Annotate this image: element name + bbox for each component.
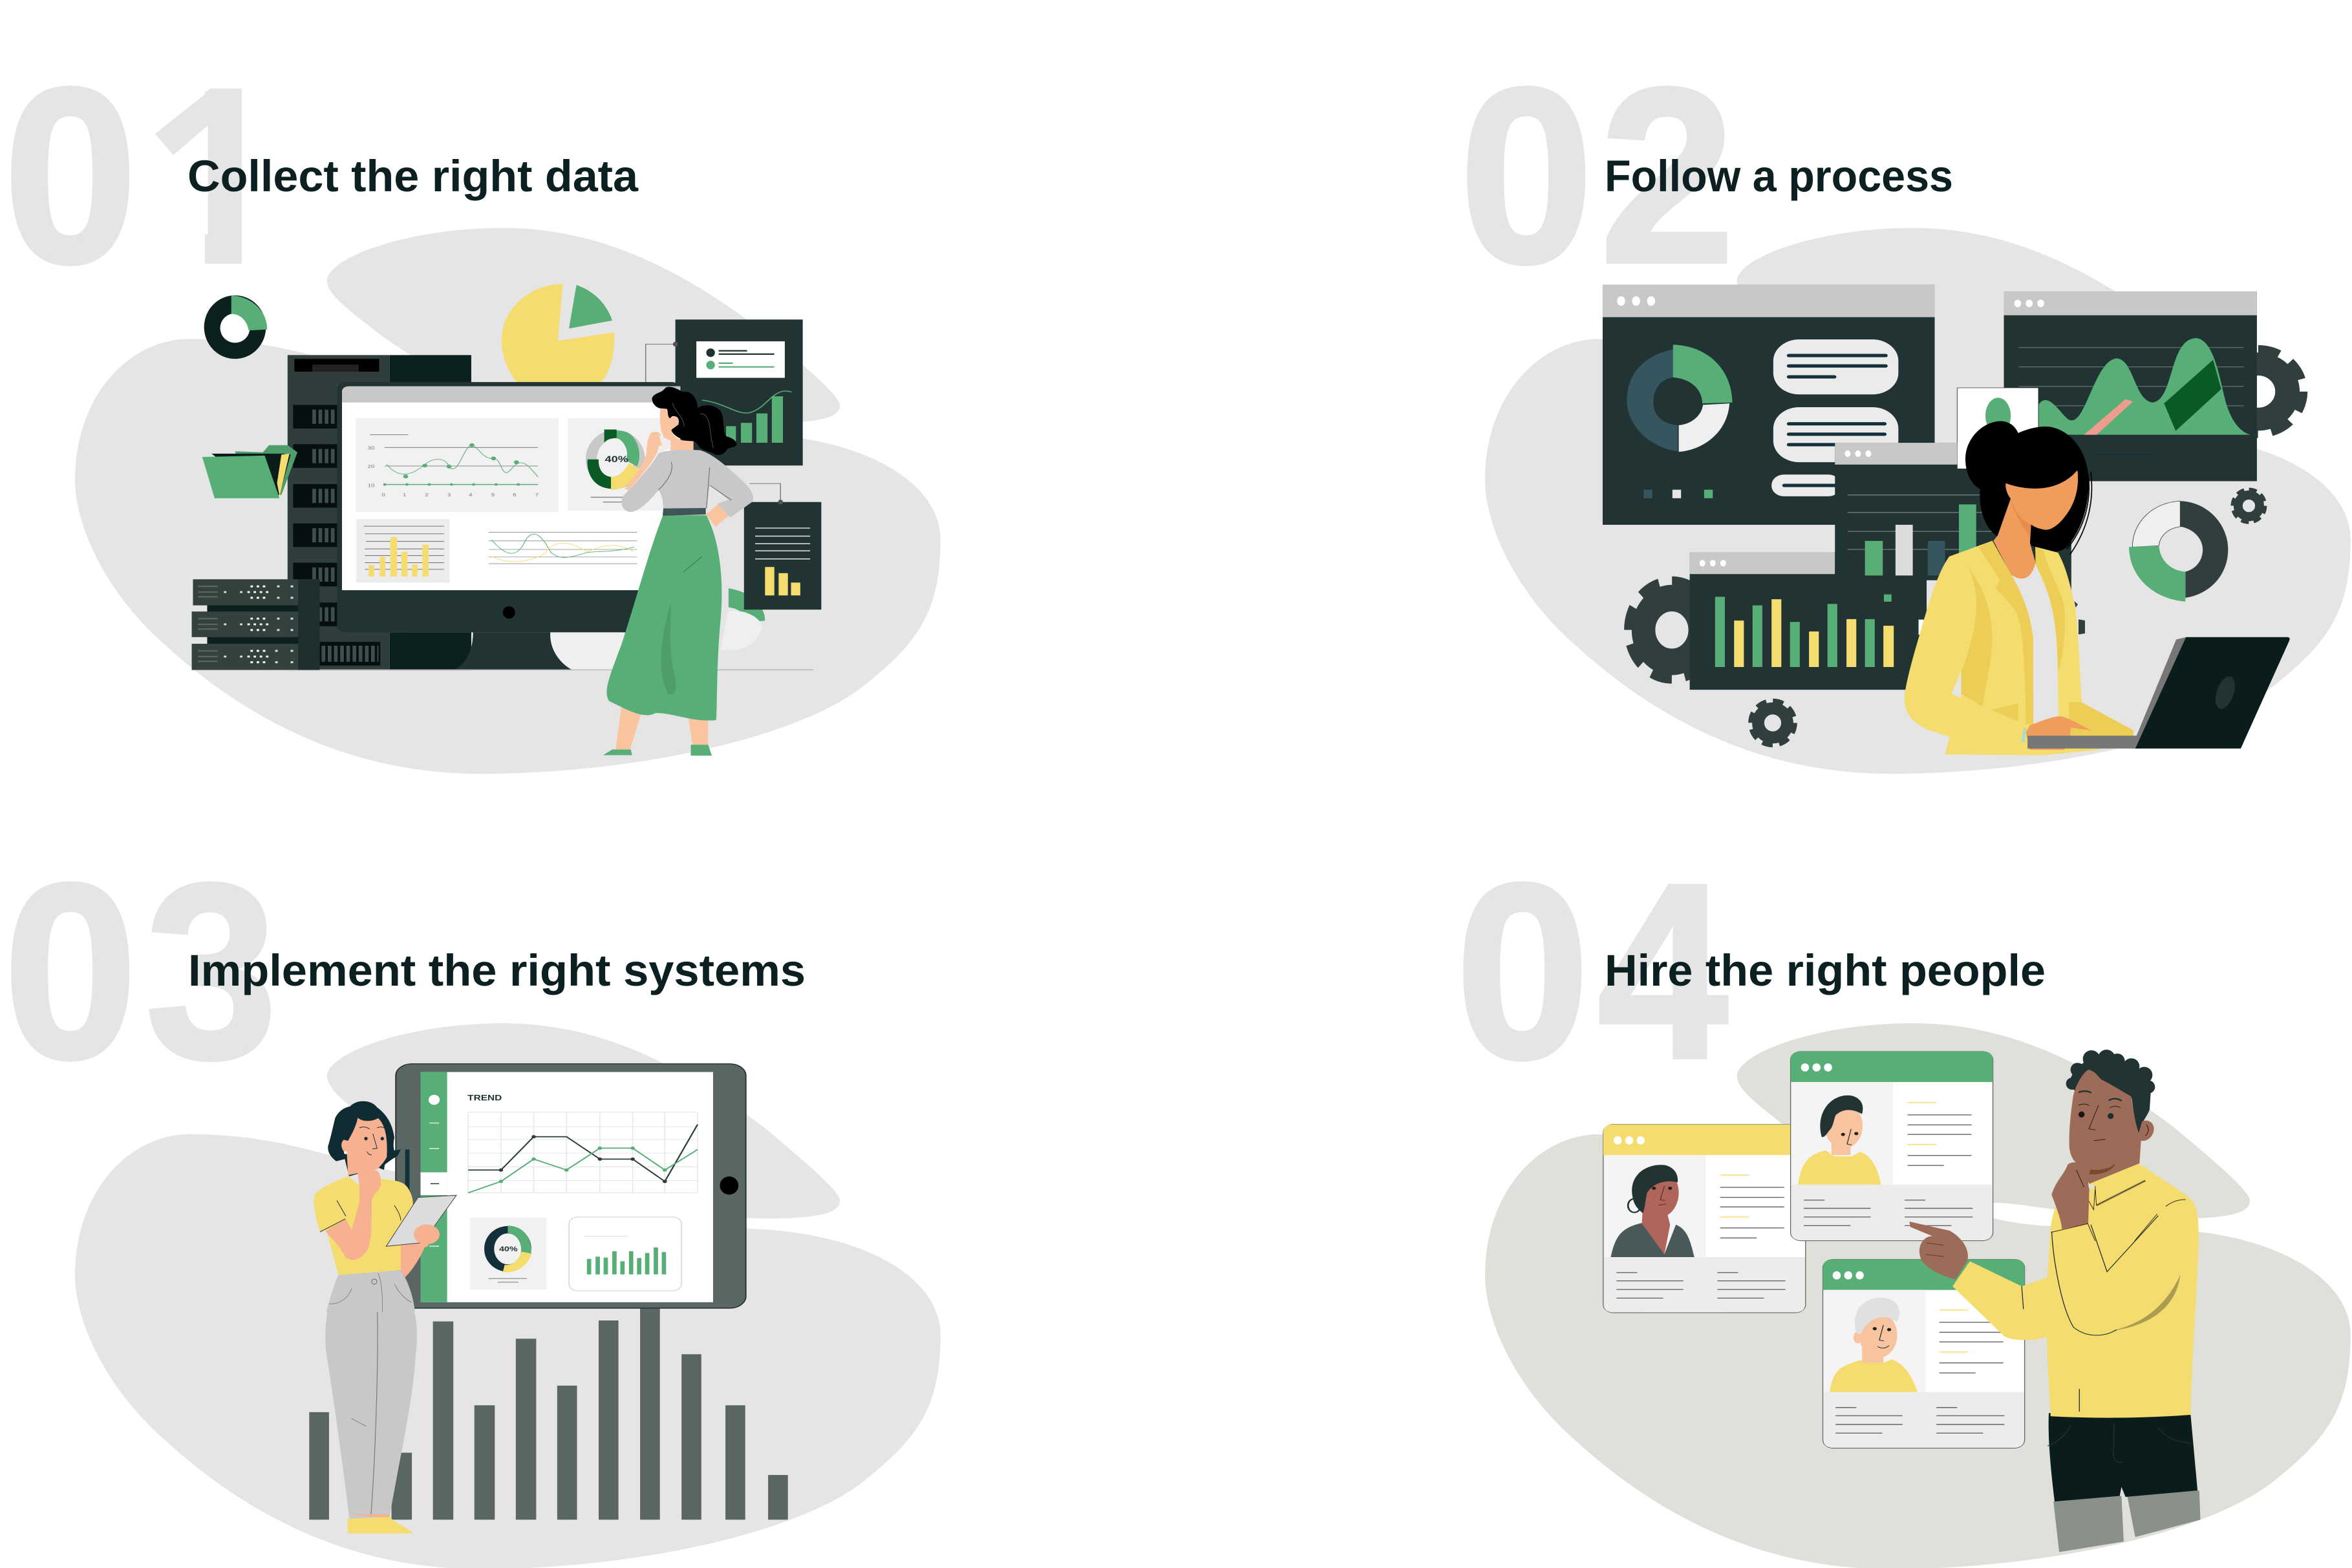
panel: 03 implement the right systems (3, 831, 941, 1568)
monitor (337, 382, 680, 670)
screen line chart: 5 (491, 492, 495, 498)
donut chart right (2129, 501, 2228, 602)
trend chart (467, 1093, 698, 1193)
illustration: process dashboards (1603, 285, 2303, 745)
illustration: tablet and bars (309, 1064, 788, 1533)
background blob (1485, 228, 2351, 774)
panel: 04 hire the right people (1455, 832, 2351, 1568)
number 01: 1 (152, 36, 290, 315)
woman with laptop (1905, 421, 2133, 756)
laptop (2027, 637, 2290, 748)
photo card (1957, 388, 2038, 469)
screen line chart: 20 (368, 463, 375, 469)
tablet device (396, 1064, 746, 1308)
gear small bottom (1751, 701, 1795, 745)
panel: 02 follow a process (1459, 36, 2351, 774)
bar chart under tablet (309, 1304, 788, 1520)
screen line chart: 7 (535, 492, 539, 498)
illustration: hiring cards (1603, 1052, 2201, 1552)
top right dark card (676, 319, 803, 465)
icon: donut chart top left (204, 295, 267, 359)
background blob (75, 228, 941, 774)
screen line chart (356, 418, 559, 512)
heading: implement the right systems: Implement the right systems (188, 946, 806, 995)
background blob (75, 1023, 941, 1568)
illustration: data dashboard (192, 284, 821, 756)
screen line chart: 30 (368, 445, 375, 450)
screen line chart: 6 (513, 492, 517, 498)
screen line chart: 2 (425, 492, 429, 498)
trend chart: TREND (467, 1093, 502, 1102)
number 04: 4 (1598, 832, 1729, 1110)
screen donut 40% (568, 418, 665, 511)
screen line chart: 1 (403, 492, 407, 498)
number 01: 0 (3, 37, 138, 315)
icon: green folder (202, 445, 297, 498)
woman: head and torso (314, 1101, 456, 1312)
number 02: 2 (1600, 36, 1735, 315)
woman: head and torso (621, 387, 753, 527)
panel: 01 collect the right data (3, 36, 941, 774)
number 01 (11, 85, 242, 266)
window: area chart (2004, 291, 2257, 481)
profile card: woman (1603, 1125, 1806, 1313)
heading: collect the right data: Collect the right data (187, 151, 639, 201)
gear right (2214, 350, 2303, 434)
heading: hire the right people: Hire the right people (1605, 946, 2046, 995)
donut card 40%: 40% (499, 1245, 518, 1253)
window: bar chart lower (1690, 552, 1927, 690)
stacked server units (192, 579, 320, 670)
profile card: older man (1823, 1260, 2025, 1448)
screen line chart: 4 (469, 492, 473, 498)
man: head and hand (2051, 1050, 2186, 1241)
gear small right (2232, 489, 2265, 522)
woman: pants and shoes (325, 1270, 417, 1533)
donut card 40% (470, 1218, 547, 1289)
man: body (1909, 1165, 2201, 1552)
server rack (288, 355, 471, 670)
ground line (192, 669, 813, 670)
gear left (1629, 582, 1715, 678)
small bars card (569, 1217, 681, 1291)
number 02: 0 (1459, 37, 1594, 315)
heading: follow a process: Follow a process (1605, 151, 1953, 201)
profile card: man (1791, 1052, 1993, 1241)
number 03: 0 (3, 832, 138, 1110)
background blob (1485, 1023, 2351, 1568)
icon: yellow pie chart (502, 284, 614, 382)
number 04 (1455, 832, 1729, 1110)
number 03: 3 (145, 831, 277, 1110)
screen line chart: 10 (368, 482, 375, 488)
number 03 (3, 831, 277, 1110)
number 04: 0 (1455, 832, 1590, 1110)
window: donut and bubbles (1603, 285, 1935, 525)
woman: legs and skirt (603, 515, 722, 756)
screen line chart: 3 (447, 492, 451, 498)
window: bar chart middle (1835, 443, 2071, 602)
number 02 (1459, 36, 1735, 315)
screen multi line chart (489, 533, 637, 564)
lower right dark card (673, 342, 821, 650)
screen line chart: 0 (381, 492, 385, 498)
screen donut 40%: 40% (605, 454, 628, 465)
connector lines (646, 344, 780, 502)
screen bar chart (356, 519, 449, 582)
